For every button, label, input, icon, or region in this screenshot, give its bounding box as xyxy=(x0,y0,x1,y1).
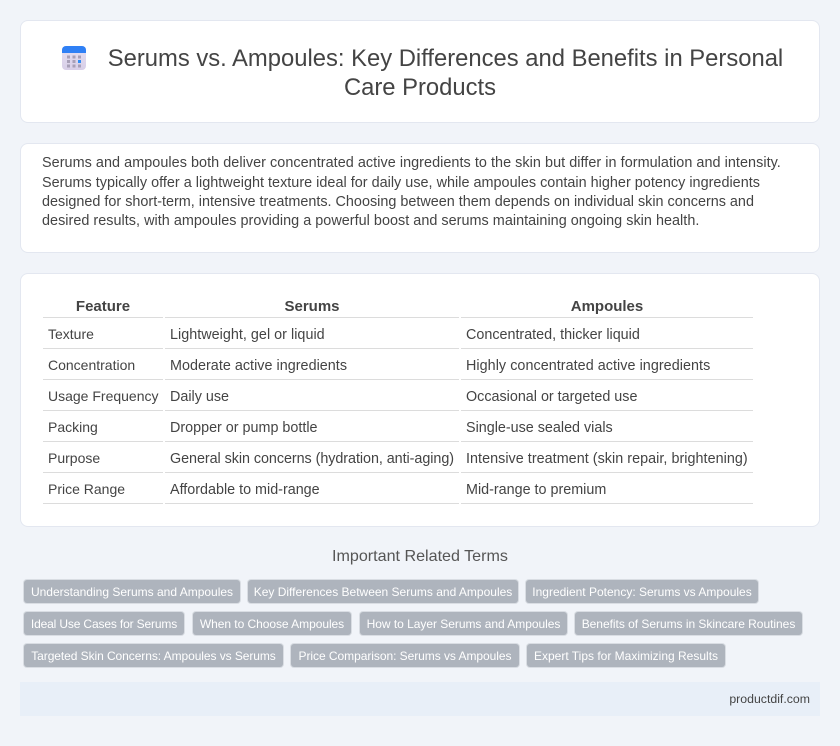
icon: calendar xyxy=(62,46,86,70)
comparison table: Single-use sealed vials xyxy=(466,420,613,436)
comparison table: Packing xyxy=(48,419,98,435)
comparison table: Concentrated, thicker liquid xyxy=(466,327,640,343)
comparison table: Affordable to mid-range xyxy=(170,482,320,498)
footer bar xyxy=(20,682,820,716)
comparison table: Ampoules xyxy=(571,298,643,315)
comparison table: Moderate active ingredients xyxy=(170,358,347,374)
tag list: related terms: Key Differences Between Serums and Ampoules xyxy=(254,585,512,599)
comparison table: Intensive treatment (skin repair, brightening) xyxy=(466,451,748,467)
comparison table: Usage Frequency xyxy=(48,388,159,404)
comparison table: Mid-range to premium xyxy=(466,482,606,498)
title: Serums vs. Ampoules: Key Differences and Benefits in Personal xyxy=(108,45,783,72)
comparison table: Highly concentrated active ingredients xyxy=(466,358,710,374)
tag list: related terms: Benefits of Serums in Skincare Routines xyxy=(582,617,795,631)
comparison table: General skin concerns (hydration, anti-aging) xyxy=(170,451,454,467)
comparison table: Lightweight, gel or liquid xyxy=(170,327,325,343)
tag list: related terms: Ideal Use Cases for Serums xyxy=(31,617,177,631)
tag list: related terms: How to Layer Serums and Ampoules xyxy=(367,617,560,631)
comparison table: Dropper or pump bottle xyxy=(170,420,318,436)
heading: related terms: Important Related Terms xyxy=(332,547,508,565)
comparison table: Concentration xyxy=(48,357,135,373)
text block: intro: designed for short-term, intensive treatments. Choosing between them depends on individual skin concerns and xyxy=(42,194,754,210)
panel: comparison table xyxy=(20,273,820,527)
panel: intro paragraph xyxy=(20,143,820,253)
footer source text: productdif.com xyxy=(729,692,810,706)
tag list: related terms: Price Comparison: Serums vs Ampoules xyxy=(299,649,511,663)
text block: intro: Serums typically offer a lightweight texture ideal for daily use, while ampoules contain higher potency ingredients xyxy=(42,175,760,191)
panel: title header xyxy=(20,20,820,123)
text block: intro xyxy=(42,155,781,229)
text block: intro: Serums and ampoules both deliver concentrated active ingredients to the skin but differ in formulation and intensity. xyxy=(42,155,781,171)
comparison table: Feature xyxy=(76,298,130,315)
comparison table: Occasional or targeted use xyxy=(466,389,637,405)
title: Care Products xyxy=(344,74,496,101)
comparison table: Serums xyxy=(284,298,340,315)
tag list: related terms: Targeted Skin Concerns: Ampoules vs Serums xyxy=(31,649,276,663)
comparison table: Daily use xyxy=(170,389,229,405)
text block: intro: desired results, with ampoules providing a powerful boost and serums maintaining ongoing skin health. xyxy=(42,213,699,229)
comparison table: Purpose xyxy=(48,450,100,466)
tag list: related terms: Expert Tips for Maximizing Results xyxy=(534,649,718,663)
tag list: related terms: When to Choose Ampoules xyxy=(200,617,344,631)
comparison table: Texture xyxy=(48,326,94,342)
tag list: related terms xyxy=(23,579,803,668)
tag list: related terms: Ingredient Potency: Serums vs Ampoules xyxy=(532,585,752,599)
tag list: related terms: Understanding Serums and Ampoules xyxy=(31,585,233,599)
title xyxy=(108,45,783,101)
comparison table xyxy=(43,298,753,504)
comparison table: Price Range xyxy=(48,481,125,497)
